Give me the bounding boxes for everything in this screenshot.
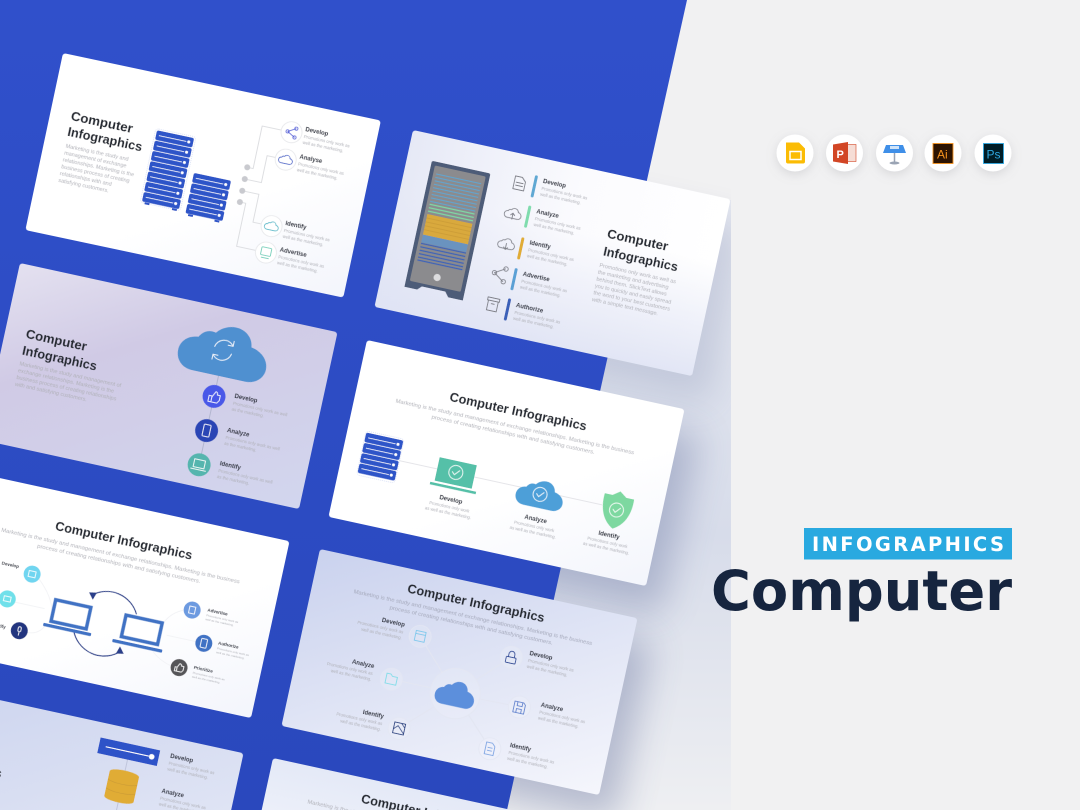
item: Develop laptop	[424, 456, 482, 520]
item: Analyze right	[506, 694, 588, 732]
item: Prioritize: Prioritize	[193, 665, 214, 674]
item: Prioritize: Promotions only work as	[192, 671, 226, 682]
item: Develop: Promotions only work as	[303, 134, 350, 149]
item: Advertise: well as the marketing.	[277, 260, 318, 274]
icon: Illustrator	[924, 134, 962, 172]
item: Analyze: Analyze	[161, 789, 185, 800]
item: Analyse	[273, 147, 346, 182]
slide: server to laptop, cloud and shield flow	[328, 340, 685, 586]
item: Authorize	[194, 633, 252, 662]
item: Analyse: Promotions only work as	[298, 161, 344, 176]
item: Analyze: Promotions only work as	[160, 796, 206, 810]
item: Develop: as the marketing.	[231, 407, 265, 418]
item: Develop right: well as the marketing.	[526, 664, 568, 678]
slide: cloud hub with six satellites: process of creating relationships with and satisfying customers.	[389, 605, 554, 647]
item: Analyze	[158, 789, 208, 810]
slide: cloud with three steps: Infographics	[21, 343, 98, 374]
item: Authorize: Promotions only work as	[217, 646, 250, 657]
item: Analyze cloud: Promotions only work	[514, 520, 556, 533]
faint connectors	[7, 574, 202, 670]
item: Identify	[259, 214, 332, 249]
item: Identify: Promotions only work as	[283, 228, 330, 242]
item: Develop left	[355, 612, 433, 649]
slide: server tower with coloured bars: Promotions only work as well as	[599, 263, 677, 285]
slide: cloud with three steps: Computer	[25, 326, 88, 354]
item: Identify: well as the marketing.	[526, 253, 568, 267]
slide: server tower with coloured bars: Infographics	[602, 244, 679, 274]
item: Develop: Develop	[542, 179, 567, 190]
item: Develop right: Develop	[529, 651, 553, 662]
item: Develop: Promotions only work as	[168, 761, 215, 775]
item: Identify right: Identify	[509, 743, 532, 754]
item: Develop left: Promotions only work as	[357, 620, 404, 635]
item: Analyse: Analyse	[299, 155, 323, 165]
item: Analyze left: well as the marketing.	[330, 668, 372, 682]
slide: cloud with three steps: exchange relationships. Marketing is the	[17, 368, 114, 395]
item: Identify right	[477, 736, 556, 774]
item: Advertise: well as the marketing.	[519, 284, 561, 298]
item: Develop right	[498, 644, 576, 682]
icon: server tower	[404, 161, 491, 301]
slide: two server racks with four branches: business process of creating	[61, 164, 130, 185]
icon: Photoshop: Ps	[986, 148, 1001, 162]
item: Develop right: Promotions only work as	[528, 658, 574, 673]
item: Authorize: well as the marketing.	[216, 650, 245, 660]
item: Identify shield: as well as the marketing.	[582, 541, 630, 556]
item: Identify: Promotions only work as well	[218, 468, 273, 485]
slide: two server racks with four branches: relationships. Marketing is the	[62, 157, 134, 178]
item: Develop: Develop	[1, 560, 20, 569]
slide: two server racks with four branches: relationships with and	[59, 171, 112, 188]
icon: central cloud	[426, 664, 485, 723]
slide: server tower with coloured bars: with a simple text message.	[590, 297, 659, 317]
item: Analyze left	[324, 654, 404, 692]
item: Analyze	[193, 417, 283, 458]
item: Authorize	[484, 294, 563, 332]
item: Analyze circle	[0, 589, 17, 609]
item: Identify left	[334, 704, 412, 742]
slide: cloud with three steps: Marketing is the study and management of	[19, 361, 122, 389]
item: Advertise: Advertise	[207, 607, 229, 617]
icon: Illustrator: Ai	[937, 148, 948, 162]
item: Identify left: Promotions only work as	[336, 711, 383, 726]
flow line	[399, 461, 602, 505]
item: Analyze cloud	[508, 476, 567, 540]
slide: cloud hub with six satellites: Computer Infographics	[406, 581, 546, 625]
slide: two server racks with four branches: Infographics	[66, 124, 144, 154]
item: Identify shield: Identify	[598, 531, 620, 541]
item: Analyze: Promotions only work as	[534, 216, 581, 231]
item: Analyse: well as the marketing.	[296, 167, 338, 181]
hub spokes	[394, 643, 517, 743]
icon: PowerPoint	[826, 134, 863, 172]
icon: Photoshop	[974, 134, 1012, 172]
item: Develop laptop: Promotions only work	[429, 500, 471, 514]
slide: server to laptop, cloud and shield flow: Computer Infographics	[448, 389, 588, 434]
icon: tall server rack	[140, 128, 196, 212]
stem	[111, 760, 128, 810]
icon: PowerPoint: P	[836, 149, 844, 161]
item: Identify	[185, 451, 275, 492]
slide: server tower with coloured bars: behind them. SlickText allows	[596, 277, 667, 298]
item: Develop	[279, 120, 352, 155]
main heading: Computer: Computer	[711, 559, 1012, 623]
item: Identify shield: Promotions only work	[587, 536, 629, 549]
item: Identify left: Identify	[362, 710, 385, 720]
slide: two server racks with four branches: Computer	[70, 108, 134, 136]
icon: left laptop	[43, 598, 97, 636]
circular exchange arrows	[69, 586, 140, 662]
item: Develop: well as the marketing.	[167, 766, 209, 780]
item: Identify: well as the marketing.	[282, 234, 324, 247]
item: Identify	[495, 232, 576, 271]
item: Analyze: Analyze	[226, 428, 250, 439]
slide: two server racks with four branches	[25, 53, 381, 298]
badge: INFOGRAPHICS	[804, 528, 1012, 560]
item: Identify: Identify	[529, 240, 552, 251]
slide: laptops exchanging data: Marketing is the study and management of exchange relationships. Marketing is the business	[1, 528, 240, 586]
slide: cloud with three steps	[0, 263, 338, 509]
item: Develop: well as the marketing.	[302, 140, 344, 153]
slide: laptops exchanging data	[0, 472, 290, 718]
item: Develop: Promotions only work as	[541, 186, 588, 201]
item: Identify: Identify	[219, 461, 242, 472]
item: Prioritize	[169, 657, 227, 686]
item: Authorize: well as the marketing.	[513, 316, 554, 329]
item: Identify: as the marketing.	[217, 474, 250, 486]
item: Authorize: Authorize	[218, 640, 240, 650]
badge: INFOGRAPHICS: INFOGRAPHICS	[812, 533, 1004, 556]
item: Advertise	[489, 263, 569, 302]
item: Identify left: well as the marketing.	[340, 718, 381, 732]
item: Analyze: as the marketing.	[224, 441, 257, 453]
item: Advertise: Promotions only work as	[521, 279, 568, 293]
item: Authorize: Promotions only work as	[514, 310, 561, 325]
slide: laptops exchanging data: process of creating relationships with and satisfying customers.	[36, 544, 201, 585]
slide: server to laptop, cloud and shield flow: Marketing is the study and management of exchange relationships. Marketing is the business	[395, 399, 635, 456]
slide: server tower with coloured bars: you to quickly and easily spread	[594, 283, 672, 306]
slide: server tower with coloured bars: Computer	[606, 226, 670, 254]
item: Identify: Identify	[285, 221, 307, 231]
item: Advertise: Promotions only work as	[278, 254, 325, 269]
item: Develop	[200, 383, 290, 424]
item: Advertise: Advertise	[522, 272, 551, 284]
item: Analyze: Analyze	[536, 209, 560, 220]
item: Advertise: Promotions only work as	[206, 613, 239, 624]
slide: laptops exchanging data: Computer Infographics	[54, 518, 194, 563]
icon: database cylinder	[104, 767, 140, 806]
slide: server tower with coloured bars: the marketing and advertising	[597, 270, 669, 291]
slide: server tower with coloured bars	[374, 130, 731, 376]
slide: cloud hub with six satellites	[281, 549, 638, 795]
item: Identify	[0, 616, 29, 641]
item: Develop: Develop	[234, 394, 258, 405]
slide: cloud with three steps: with and satisfying customers.	[13, 382, 88, 403]
slide: server bar and database stack	[0, 684, 244, 810]
blue background panel	[0, 0, 687, 810]
item: Analyze right: well as the marketing.	[538, 715, 579, 729]
item: Identify shield	[582, 486, 642, 556]
item: Develop: Develop	[169, 754, 194, 765]
item: Develop left: well as the marketing.	[361, 627, 402, 640]
slide shadow band	[508, 200, 731, 810]
icon: large cloud with refresh arrows	[175, 316, 273, 385]
slide: server to laptop, cloud and shield flow: process of creating relationships with and satisfying customers.	[431, 415, 596, 456]
icon: Keynote	[876, 134, 913, 172]
timeline stem	[201, 373, 219, 456]
item: Develop laptop: as well as the marketing.	[424, 505, 472, 520]
slide: two server racks with four branches: management of exchange	[64, 150, 127, 170]
icon: short server rack	[185, 173, 231, 223]
slide: server tower with coloured bars: the word to your best customers	[593, 290, 671, 313]
item: Authorize: Authorize	[515, 303, 544, 315]
slide: cloud with three steps: business process of creating relationships	[16, 375, 117, 403]
item: Develop: well as the marketing.	[540, 192, 581, 205]
item: Analyze cloud: as well as the marketing.	[509, 525, 556, 540]
slide: two server racks with four branches: Marketing is the study and	[65, 144, 129, 163]
item: Develop laptop: Develop	[439, 495, 463, 506]
item: Analyze: well as the marketing.	[533, 222, 575, 236]
item: Develop: Promotions only work as well	[233, 401, 288, 417]
connector tree	[228, 124, 281, 250]
item: Analyze: Promotions only work as well	[225, 435, 280, 452]
item: Identify right: Promotions only work as	[508, 750, 555, 765]
item: Advertise	[182, 600, 241, 629]
item: Analyze right: Promotions only work as	[539, 710, 586, 724]
format icons row	[776, 134, 1012, 172]
item: Develop	[167, 754, 216, 781]
item: Identify right: well as the marketing.	[507, 756, 548, 769]
item: Identify: Promotions only work as	[528, 247, 574, 262]
icon: right laptop	[112, 613, 168, 653]
slide: partial slide at bottom	[234, 758, 591, 810]
item: Develop	[0, 559, 42, 584]
item: Advertise: well as the marketing.	[205, 617, 234, 627]
item: Develop: Develop	[305, 127, 329, 138]
icon: server rack	[357, 431, 404, 483]
slide: two server racks with four branches: satisfying customers.	[58, 178, 110, 195]
icon: Google Slides	[776, 134, 814, 172]
item: Analyze right: Analyze	[540, 703, 564, 714]
item: Analyze left: Promotions only work as	[326, 661, 373, 676]
item: Advertise: Advertise	[279, 247, 308, 259]
item: Prioritize: well as the marketing.	[192, 675, 221, 685]
slide: cloud hub with six satellites: Marketing is the study and management of exchange relationships. Marketing is the business	[353, 589, 593, 647]
item: Advertise	[253, 240, 327, 275]
item: Analyze cloud: Analyze	[524, 515, 548, 526]
item: Analyze	[502, 201, 583, 239]
icon: server bar	[97, 737, 160, 766]
item: Analyze left: Analyze	[351, 659, 375, 670]
item: Develop	[512, 171, 590, 209]
item: Develop left: Develop	[381, 618, 406, 629]
